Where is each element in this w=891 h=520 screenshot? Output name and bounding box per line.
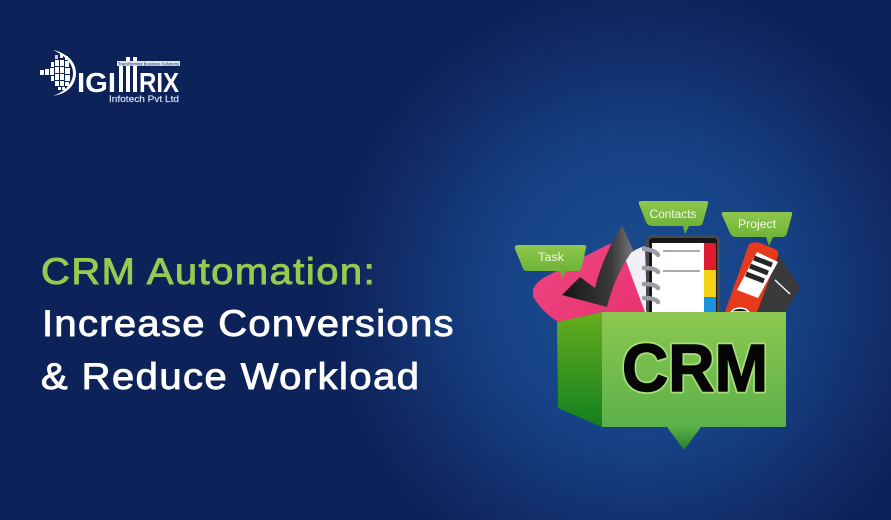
logo: T bars	[119, 57, 137, 92]
pink folder	[533, 240, 646, 322]
bubble: Task: Task	[538, 252, 564, 264]
spiral rings	[644, 249, 658, 302]
logo	[40, 50, 180, 104]
notebook cover	[646, 235, 720, 315]
title line 1: CRM Automation:	[41, 251, 375, 293]
icon: globe	[40, 50, 76, 96]
notebook	[644, 235, 720, 315]
binder label	[737, 252, 778, 298]
bubble: Project: Project	[738, 219, 777, 231]
bubble: Contacts: Contacts	[650, 209, 697, 221]
bubble: Task	[515, 245, 586, 278]
CRM label: CRM	[622, 331, 768, 406]
notebook tabs	[704, 243, 716, 270]
logo subtitle: Infotech Pvt Ltd	[109, 94, 179, 104]
box bottom tip	[667, 427, 701, 450]
notebook lines	[663, 250, 700, 252]
bubble: Contacts	[639, 201, 708, 234]
title line 3: & Reduce Workload	[41, 356, 419, 398]
notebook page	[652, 243, 704, 312]
bubble: Project	[722, 212, 792, 246]
binder hole	[731, 308, 749, 312]
checkmark	[562, 225, 633, 307]
logo wordmark: RIX: RIX	[139, 67, 179, 98]
box front	[602, 312, 786, 427]
red binder	[725, 242, 778, 312]
box side	[557, 312, 602, 427]
title	[41, 251, 453, 398]
logo wordmark: IGI: IGI	[77, 67, 116, 98]
logo tagline: Transforming Business Solutions	[118, 61, 180, 66]
CRM label: CRM	[622, 331, 768, 406]
dark binder	[757, 253, 800, 312]
pie white wedge	[625, 246, 647, 312]
title line 2: Increase Conversions	[42, 303, 453, 345]
CRM box illustration	[515, 201, 800, 450]
